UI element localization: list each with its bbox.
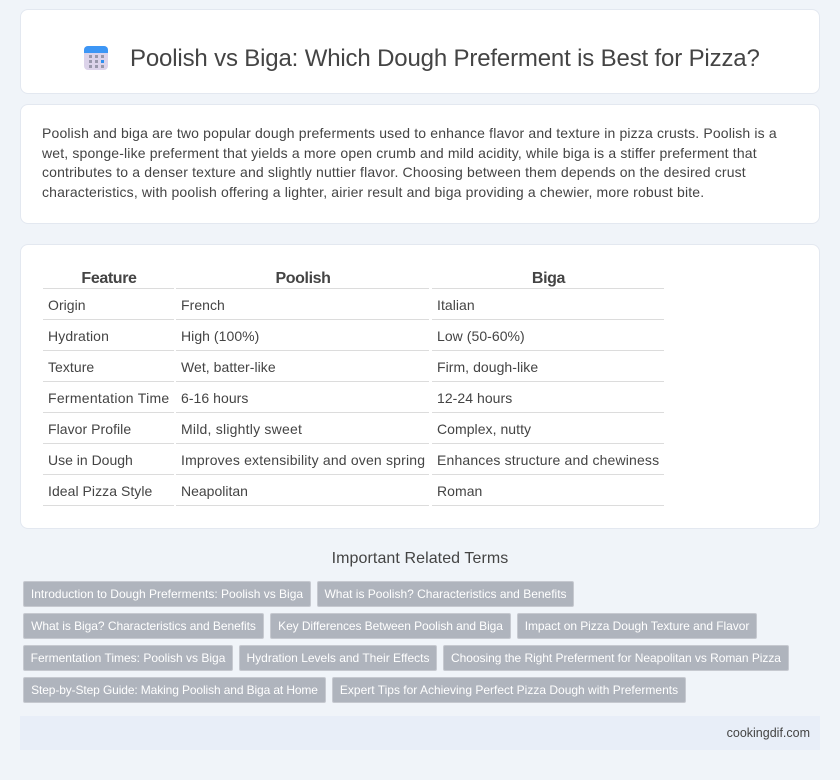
table rows: Hydration: [48, 328, 109, 344]
table rows: Complex, nutty: [437, 421, 531, 437]
table rows: Roman: [437, 483, 482, 499]
related term tags: Hydration Levels and Their Effects: [246, 651, 430, 665]
related term tags: What is Poolish? Characteristics and Benefits: [324, 587, 567, 601]
table rows: Mild, slightly sweet: [181, 421, 302, 437]
table rows: Italian: [437, 297, 475, 313]
related term tags: Key Differences Between Poolish and Biga: [278, 619, 503, 633]
table header: Biga: [532, 270, 565, 287]
title: Poolish vs Biga: Which Dough Preferment is Best for Pizza?: [130, 45, 760, 72]
related term tags: Impact on Pizza Dough Texture and Flavor: [525, 619, 749, 633]
related term tags: Expert Tips for Achieving Perfect Pizza Dough with Preferments: [340, 683, 678, 697]
related term tags: Introduction to Dough Preferments: Poolish vs Biga: [31, 587, 303, 601]
table rows: [43, 288, 664, 506]
intro paragraph: Poolish and biga are two popular dough preferments used to enhance flavor and texture in pizza crusts. Poolish is a: [42, 125, 777, 141]
table rows: Improves extensibility and oven spring: [181, 452, 425, 468]
icon: calendar: [84, 46, 108, 70]
intro paragraph: characteristics, with poolish offering a lighter, airier result and biga providing a chewier, more robust bite.: [42, 184, 704, 200]
table header: [81, 270, 566, 287]
table rows: Low (50-60%): [437, 328, 525, 344]
table header: Feature: [81, 270, 137, 287]
table rows: Texture: [48, 359, 94, 375]
table rows: French: [181, 297, 225, 313]
table rows: Wet, batter-like: [181, 359, 276, 375]
table rows: Ideal Pizza Style: [48, 483, 152, 499]
table header: Poolish: [275, 270, 331, 287]
footer bar: [20, 716, 820, 750]
table rows: Firm, dough-like: [437, 359, 538, 375]
table rows: 6-16 hours: [181, 390, 248, 406]
intro paragraph: contributes to a denser texture and slightly nuttier flavor. Choosing between them depends on the desired crust: [42, 164, 746, 180]
table rows: Enhances structure and chewiness: [437, 452, 659, 468]
table rows: 12-24 hours: [437, 390, 512, 406]
related term tags: Fermentation Times: Poolish vs Biga: [31, 651, 225, 665]
panel: introduction text: [20, 104, 820, 224]
related term tags: Step-by-Step Guide: Making Poolish and Biga at Home: [31, 683, 318, 697]
related term tags: [23, 581, 789, 703]
panel: comparison table: [20, 244, 820, 529]
table rows: High (100%): [181, 328, 259, 344]
panel: title header: [20, 9, 820, 94]
intro paragraph: [42, 125, 777, 200]
footer site name: cookingdif.com: [727, 726, 810, 740]
heading: related terms: Important Related Terms: [332, 550, 508, 567]
related term tags: What is Biga? Characteristics and Benefits: [31, 619, 256, 633]
table rows: Fermentation Time: [48, 390, 169, 406]
related term tags: Choosing the Right Preferment for Neapolitan vs Roman Pizza: [451, 651, 781, 665]
intro paragraph: wet, sponge-like preferment that yields a more open crumb and mild acidity, while biga is a stiffer preferment that: [42, 145, 757, 161]
table rows: Use in Dough: [48, 452, 133, 468]
table rows: Neapolitan: [181, 483, 248, 499]
table rows: Origin: [48, 297, 86, 313]
table rows: Flavor Profile: [48, 421, 131, 437]
